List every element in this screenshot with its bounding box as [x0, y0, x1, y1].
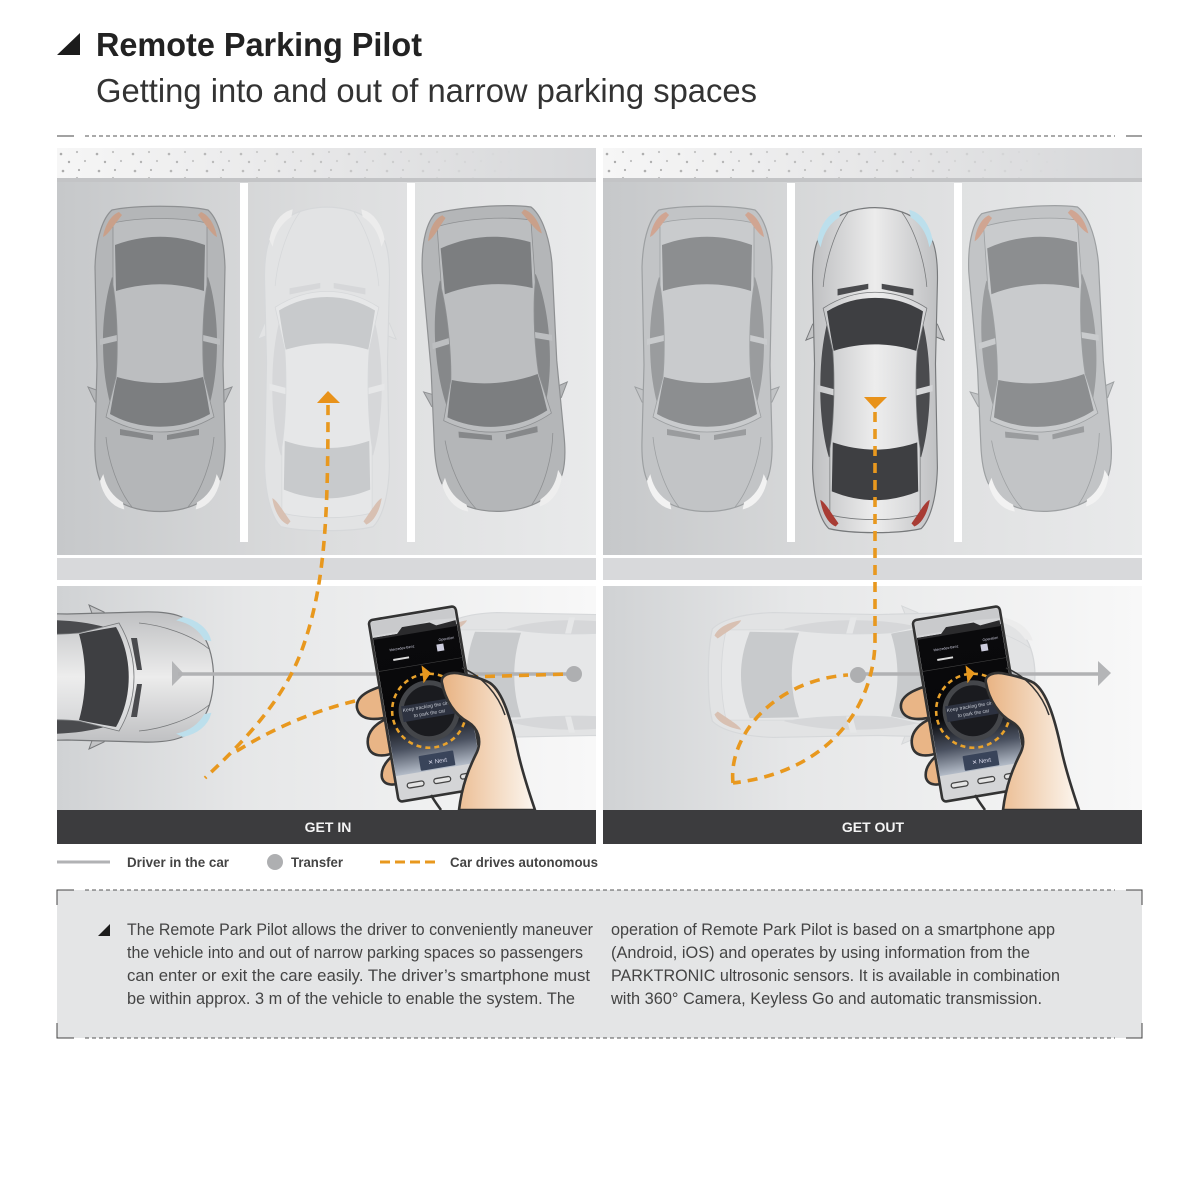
panel: get out — [603, 148, 1142, 844]
parking area — [603, 182, 1142, 555]
hand holding smartphone — [901, 606, 1079, 810]
smartphone: to park the car — [413, 708, 446, 719]
description panel — [57, 890, 1142, 1038]
title block — [57, 26, 757, 109]
legend — [57, 854, 598, 870]
subtitle: Getting into and out of narrow parking spaces — [96, 72, 757, 109]
label bar: get in: GET IN — [305, 819, 351, 835]
text column 1: the vehicle into and out of narrow parking spaces so passengers — [127, 944, 583, 962]
text column 2: (Android, iOS) and operates by using information from the — [611, 944, 1030, 962]
smartphone: Mercedes-Benz — [933, 644, 959, 652]
parked car right — [958, 202, 1122, 516]
legend: car drives autonomous: Car drives autonomous — [450, 855, 598, 870]
label bar: get out — [603, 810, 1142, 844]
parking area — [57, 182, 596, 555]
line: driver in the car — [858, 661, 1111, 686]
smartphone: Keep tracking the circle — [946, 700, 999, 714]
smartphone: Operation — [438, 636, 455, 642]
driver car in lane — [57, 604, 214, 750]
smartphone: ✕ Next — [428, 757, 448, 767]
ghost car in lane — [458, 612, 596, 738]
route: car drives autonomous — [733, 397, 887, 783]
title: Remote Parking Pilot — [96, 26, 422, 63]
route: car drives autonomous — [205, 391, 570, 778]
curb strip with gravel — [57, 148, 596, 182]
line: driver in the car — [172, 661, 570, 686]
icon: bullet triangle — [98, 924, 110, 936]
text column 1: can enter or exit the care easily. The driver’s smartphone must — [127, 967, 590, 985]
arrow down — [864, 397, 887, 409]
label bar: get in — [57, 810, 596, 844]
ghost car target position — [258, 207, 396, 531]
smartphone — [912, 606, 1030, 802]
smartphone — [368, 606, 486, 802]
smartphone: Keep tracking the circle — [402, 700, 455, 714]
lane area — [57, 586, 596, 810]
hand holding smartphone — [357, 606, 535, 810]
text column 2: PARKTRONIC ultrosonic sensors. It is available in combination — [611, 967, 1060, 985]
legend: driver in the car: Driver in the car — [127, 855, 230, 870]
curb strip with gravel — [603, 148, 1142, 182]
legend: transfer: Transfer — [291, 855, 344, 870]
icon: heading triangle — [57, 33, 80, 55]
text column 2: operation of Remote Park Pilot is based on a smartphone app — [611, 921, 1055, 939]
parked car right — [411, 202, 576, 516]
smartphone: Mercedes-Benz — [389, 644, 415, 652]
legend: transfer — [267, 854, 344, 870]
text column 1: The Remote Park Pilot allows the driver to conveniently maneuver — [127, 921, 593, 939]
transfer dot — [566, 666, 582, 682]
transfer dot — [850, 667, 866, 683]
active car leaving space — [806, 208, 944, 533]
parked car left — [635, 206, 779, 512]
smartphone: to park the car — [957, 708, 990, 719]
text column 2 — [610, 921, 1060, 1008]
text column 1 — [127, 921, 593, 1008]
parked car left — [88, 206, 232, 512]
ghost car in lane — [708, 606, 1035, 744]
smartphone: Operation — [982, 636, 999, 642]
label bar: get out: GET OUT — [842, 819, 905, 835]
smartphone: ✕ Next — [972, 757, 992, 767]
text column 2: with 360° Camera, Keyless Go and automatic transmission. — [610, 990, 1042, 1008]
arrow up — [317, 391, 340, 403]
panel: get in — [57, 148, 596, 844]
text column 1: be within approx. 3 m of the vehicle to enable the system. The — [127, 990, 575, 1008]
lane area — [603, 586, 1142, 810]
